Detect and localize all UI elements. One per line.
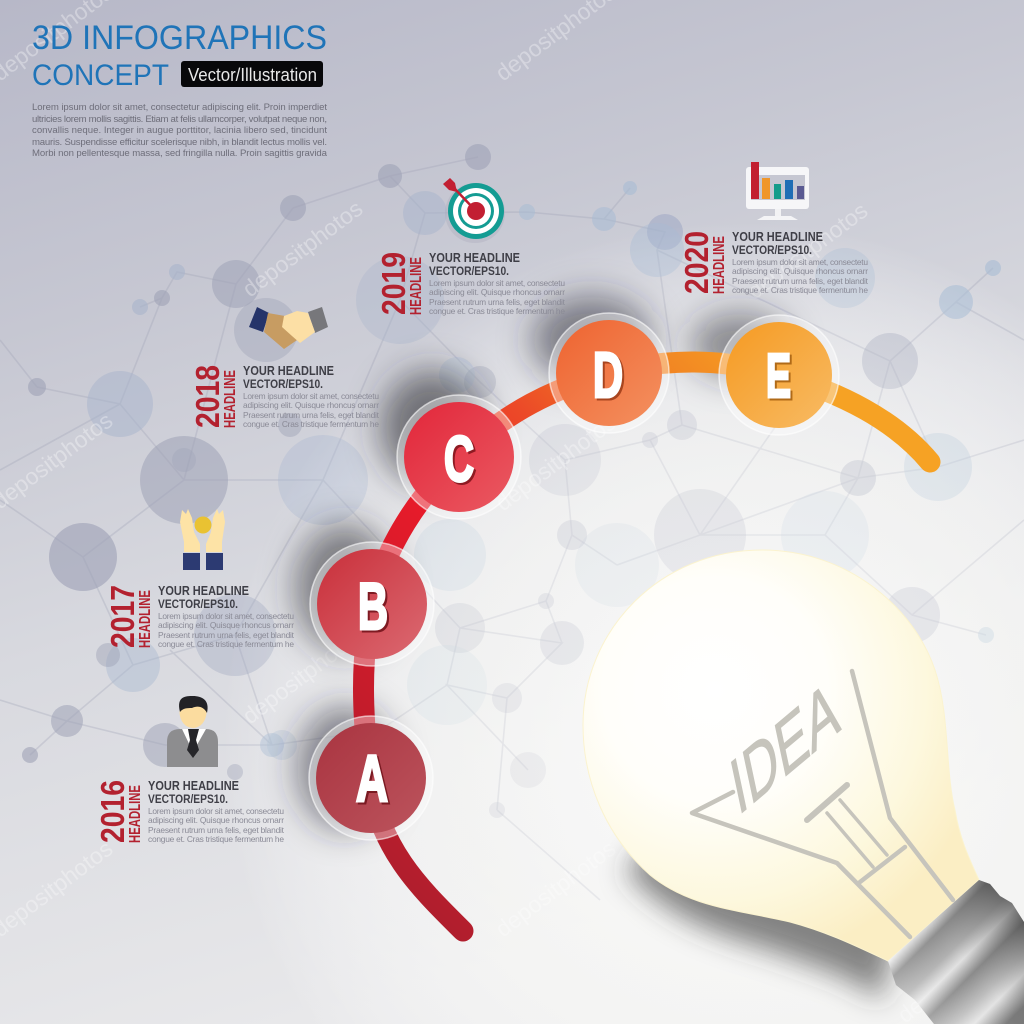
- step D: [549, 313, 669, 433]
- title: 3D INFOGRAPHICS: [32, 19, 327, 57]
- step C: [397, 395, 521, 519]
- text: depositphotos: [237, 622, 367, 729]
- text block: 2019: adipiscing elit. Quisque rhoncus ornarr: [429, 287, 565, 297]
- text block: 2016: congue et. Cras tristique fermentum he: [148, 834, 284, 844]
- filament: [692, 671, 953, 937]
- text block: 2018: HEADLINE: [222, 370, 239, 428]
- text block: 2016: Lorem ipsum dolor sit amet, consectetu: [148, 806, 284, 816]
- intro paragraph: ultricies lorem mollis sagittis. Etiam at felis ullamcorper, volutpat neque non,: [32, 114, 327, 125]
- text: depositphotos: [237, 195, 367, 302]
- screw base: [888, 880, 1024, 1024]
- text block: 2019: HEADLINE: [408, 257, 425, 315]
- text block: 2020: Praesent rutrum urna felis, eget blandit: [732, 276, 869, 286]
- step D: D: [593, 339, 623, 411]
- text block: 2017: YOUR HEADLINE: [158, 584, 249, 598]
- text block: 2017: Lorem ipsum dolor sit amet, consectetu: [158, 611, 294, 621]
- text block: 2018: Lorem ipsum dolor sit amet, consectetu: [243, 391, 379, 401]
- text block: 2017: HEADLINE: [137, 590, 154, 648]
- text block: 2016: HEADLINE: [127, 785, 144, 843]
- light bulb: [583, 550, 1024, 1024]
- text block: 2018: YOUR HEADLINE: [243, 364, 334, 378]
- title: [32, 19, 327, 92]
- text: depositphotos: [742, 625, 872, 732]
- text block: 2019: VECTOR/EPS10.: [429, 266, 509, 278]
- icon: handshake: [249, 307, 328, 349]
- text: depositphotos: [742, 197, 872, 304]
- icon: monitor bar chart: [746, 162, 809, 220]
- step D: D: [595, 341, 625, 413]
- text: depositphotos: [490, 409, 620, 516]
- timeline arc: [364, 362, 930, 931]
- text block: 2016: Praesent rutrum urna felis, eget blandit: [148, 825, 285, 835]
- text block: 2017: VECTOR/EPS10.: [158, 599, 238, 611]
- text block: 2018: 2018: [189, 365, 226, 428]
- text block: 2020: HEADLINE: [711, 236, 728, 294]
- step E: E: [768, 344, 793, 413]
- text block: 2018: congue et. Cras tristique fermentum he: [243, 419, 379, 429]
- text block: 2020: 2020: [678, 231, 715, 294]
- badge: Vector/Illustration: Vector/Illustration: [188, 64, 317, 85]
- IDEA lettering: IDEA: [724, 663, 845, 832]
- text block: 2019: YOUR HEADLINE: [429, 251, 520, 265]
- text block: 2018: VECTOR/EPS10.: [243, 379, 323, 391]
- step A: A: [358, 743, 390, 817]
- text block: 2017: Praesent rutrum urna felis, eget blandit: [158, 630, 295, 640]
- step B: [310, 542, 434, 666]
- text block: 2019: Lorem ipsum dolor sit amet, consectetu: [429, 278, 565, 288]
- intro paragraph: Morbi non pellentesque massa, sed fringilla nulla. Proin sagittis gravida: [32, 148, 328, 159]
- text block: 2020: VECTOR/EPS10.: [732, 245, 812, 257]
- step C: C: [446, 425, 476, 497]
- timeline shadows: [295, 296, 790, 830]
- text block: 2020: [678, 230, 869, 295]
- text block: 2016: YOUR HEADLINE: [148, 779, 239, 793]
- intro paragraph: Lorem ipsum dolor sit amet, consectetur adipiscing elit. Proin imperdiet: [32, 102, 327, 113]
- text block: 2017: adipiscing elit. Quisque rhoncus ornarr: [158, 620, 294, 630]
- text block: 2019: [375, 251, 566, 316]
- text block: 2018: Praesent rutrum urna felis, eget blandit: [243, 410, 380, 420]
- text: depositphotos: [490, 835, 620, 942]
- text block: 2016: VECTOR/EPS10.: [148, 794, 228, 806]
- text block: 2020: congue et. Cras tristique fermentum he: [732, 285, 868, 295]
- icon: businessman: [167, 696, 218, 767]
- icon: target: [443, 178, 504, 239]
- step E: [719, 315, 839, 435]
- text block: 2019: congue et. Cras tristique fermentum he: [429, 306, 565, 316]
- text block: 2020: adipiscing elit. Quisque rhoncus ornarr: [732, 266, 868, 276]
- intro paragraph: convallis neque. Integer in augue porttitor, lacinia libero sed, tincidunt: [32, 125, 327, 136]
- intro paragraph: mauris. Suspendisse efficitur scelerisque nibh, in blandit lectus mollis vel.: [32, 137, 327, 148]
- icon: hands with coin: [180, 509, 225, 570]
- step E: E: [766, 342, 791, 411]
- title: CONCEPT: [32, 59, 169, 92]
- intro paragraph: [32, 102, 328, 159]
- text block: 2016: adipiscing elit. Quisque rhoncus ornarr: [148, 815, 284, 825]
- step A: [309, 716, 433, 840]
- text block: 2017: 2017: [104, 585, 141, 648]
- text block: 2020: Lorem ipsum dolor sit amet, consectetu: [732, 257, 868, 267]
- step B: B: [360, 571, 390, 645]
- bulb shadow: [625, 800, 900, 1000]
- step B: B: [358, 569, 388, 643]
- text block: 2016: 2016: [94, 780, 131, 843]
- text block: 2018: adipiscing elit. Quisque rhoncus ornarr: [243, 400, 379, 410]
- text block: 2017: [104, 584, 295, 649]
- step A: A: [356, 741, 388, 815]
- text block: 2016: [94, 779, 285, 844]
- bulb glass: [583, 550, 979, 961]
- text block: 2018: [189, 364, 380, 429]
- text block: 2020: YOUR HEADLINE: [732, 230, 823, 244]
- step C: C: [444, 423, 474, 495]
- text block: 2017: congue et. Cras tristique fermentum he: [158, 639, 294, 649]
- text block: 2019: 2019: [375, 252, 412, 315]
- text block: 2019: Praesent rutrum urna felis, eget blandit: [429, 297, 566, 307]
